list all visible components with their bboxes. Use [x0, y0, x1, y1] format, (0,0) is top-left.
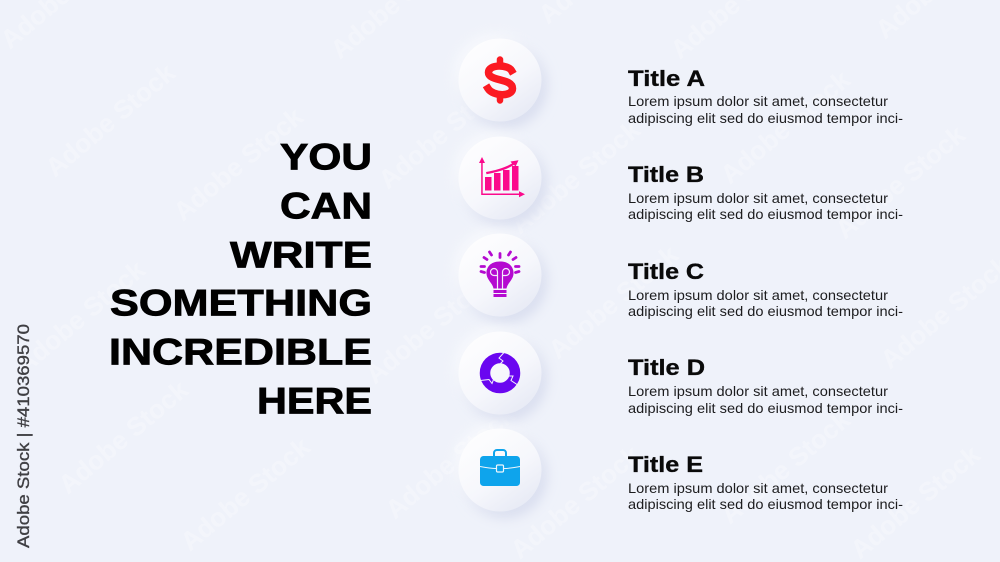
text: Adobe Stock — [373, 69, 514, 195]
heading: you can write something incredible here: CAN — [280, 186, 372, 226]
heading: you can write something incredible here: INCREDIBLE — [109, 332, 372, 372]
text: Adobe Stock — [505, 439, 646, 562]
heading: you can write something incredible here: WRITE — [230, 234, 372, 276]
text: Adobe Stock — [505, 114, 646, 240]
title C: Title C — [628, 259, 704, 284]
icon: briefcase — [480, 450, 520, 486]
body B: adipiscing elit sed do eiusmod tempor inci- — [628, 206, 903, 222]
text: Adobe Stock — [845, 439, 986, 562]
body C — [628, 287, 903, 319]
body D: Lorem ipsum dolor sit amet, consectetur — [628, 383, 888, 399]
text: Adobe Stock — [53, 374, 194, 500]
body A: Lorem ipsum dolor sit amet, consectetur — [628, 93, 888, 109]
heading: you can write something incredible here: SOMETHING — [110, 282, 372, 324]
heading: you can write something incredible here — [109, 136, 372, 422]
knob A with dollar icon — [454, 34, 547, 128]
text: Adobe Stock — [168, 101, 309, 227]
body A: adipiscing elit sed do eiusmod tempor inci- — [628, 110, 903, 126]
body B: Lorem ipsum dolor sit amet, consectetur — [628, 190, 888, 206]
text: Adobe Stock — [830, 119, 971, 245]
text: Adobe Stock — [715, 404, 856, 530]
title B: Title B — [628, 162, 704, 187]
text: Adobe Stock — [10, 254, 151, 380]
text: Adobe Stock — [380, 399, 521, 525]
knob E with briefcase icon — [454, 424, 547, 518]
icon: cycle arrows — [480, 352, 517, 388]
icon: light bulb — [481, 252, 519, 297]
title A: Title A — [628, 66, 705, 91]
watermark id: Adobe Stock number: Adobe Stock | #410369570 — [14, 324, 33, 548]
knob D with cycle icon — [454, 327, 547, 421]
body C: Lorem ipsum dolor sit amet, consectetur — [628, 287, 888, 303]
body D: adipiscing elit sed do eiusmod tempor inci- — [628, 400, 903, 416]
title D: Title D — [628, 355, 705, 380]
text block D — [628, 355, 903, 416]
text: Adobe Stock — [175, 431, 316, 557]
icon: dollar sign — [488, 60, 512, 100]
knob C with light bulb icon — [454, 229, 547, 323]
text: Adobe Stock — [715, 64, 856, 190]
knob B with chart icon — [454, 132, 547, 226]
body A — [628, 93, 903, 126]
text block A — [628, 66, 903, 126]
title E: Title E — [628, 452, 703, 477]
body E: adipiscing elit sed do eiusmod tempor inci- — [628, 496, 903, 512]
body B — [628, 190, 903, 222]
heading: you can write something incredible here: YOU — [280, 136, 372, 178]
body C: adipiscing elit sed do eiusmod tempor inci- — [628, 303, 903, 319]
text block E — [628, 452, 903, 512]
icon: growth chart — [479, 157, 525, 197]
text block B — [628, 162, 903, 222]
text: Adobe Stock — [360, 264, 501, 390]
text: Adobe Stock — [543, 239, 684, 365]
body E: Lorem ipsum dolor sit amet, consectetur — [628, 480, 888, 496]
text block C — [628, 259, 903, 319]
body D — [628, 383, 903, 416]
text: Adobe Stock — [40, 57, 181, 183]
heading: you can write something incredible here: HERE — [257, 380, 372, 422]
body E — [628, 480, 903, 512]
